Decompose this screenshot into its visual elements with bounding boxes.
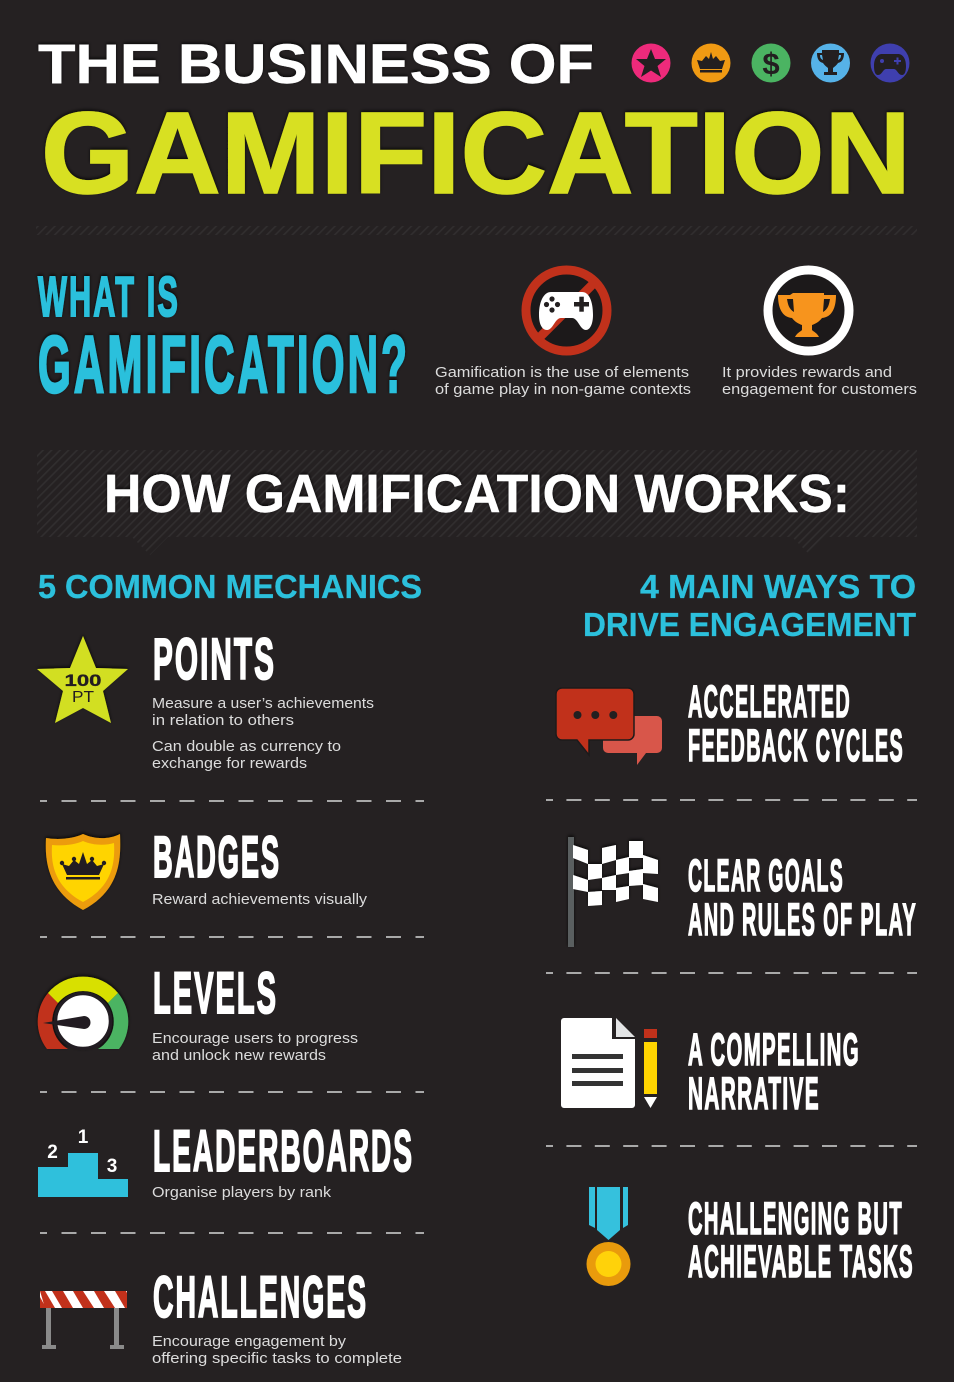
icon: 100 pt star: 100 — [64, 671, 102, 690]
mechanic: challenges: CHALLENGES — [153, 1265, 368, 1330]
text: levels description: Encourage users to progress — [152, 1031, 358, 1047]
way: accelerated feedback cycles — [556, 676, 904, 771]
text: definition — [435, 365, 691, 398]
text: points description: Measure a user’s achievements — [152, 696, 374, 712]
icon: crossed out game controller — [526, 270, 607, 351]
heading: 4 main ways to drive engagement: 4 MAIN WAYS TO — [640, 568, 916, 605]
text: challenges description: offering specific tasks to complete — [152, 1351, 402, 1367]
mechanic: leaderboards — [38, 1119, 414, 1201]
icon: trophy in ring — [768, 270, 849, 351]
text: accelerated feedback cycles — [688, 676, 904, 771]
mechanic: challenges — [40, 1265, 402, 1367]
icon: dollar badge — [752, 44, 790, 82]
icon: controller badge — [870, 44, 910, 82]
icon: dollar badge: $ — [762, 46, 780, 81]
text: points description: exchange for rewards — [152, 756, 307, 772]
header badge icons — [632, 44, 910, 82]
heading line: Gamification?: GAMIFICATION? — [38, 320, 410, 410]
heading: points: POINTS — [153, 627, 276, 692]
heading: 4 main ways to drive engagement: DRIVE ENGAGEMENT — [583, 606, 916, 643]
text: challenging but achievable tasks — [688, 1193, 914, 1287]
icon: speech bubbles — [556, 688, 662, 765]
icon: medal — [586, 1187, 630, 1286]
icon: crown badge — [692, 44, 730, 82]
heading: 4 main ways to drive engagement — [583, 568, 916, 643]
heading: levels: LEVELS — [153, 961, 278, 1026]
icon: 100 pt star: PT — [72, 689, 95, 706]
way: clear goals — [568, 837, 917, 947]
text: badges description: Reward achievements visually — [152, 892, 368, 908]
mechanic: levels — [38, 961, 358, 1064]
mechanic: points — [37, 627, 374, 772]
text: challenges description: Encourage engagement by — [152, 1334, 347, 1350]
panel: 4 main ways to drive engagement — [546, 568, 917, 1287]
text: points description — [152, 696, 374, 772]
mechanic: badges: BADGES — [153, 825, 281, 890]
way: challenging but achievable tasks — [586, 1187, 914, 1287]
panel: how gamification works banner — [37, 450, 917, 555]
heading line: What is: WHAT IS — [38, 265, 180, 329]
title line: Gamification: GAMIFICATION — [41, 88, 911, 218]
title line: The Business of: THE BUSINESS OF — [38, 32, 594, 95]
icon: 100 pt star — [37, 636, 128, 723]
text: levels description: and unlock new rewards — [152, 1048, 326, 1064]
definition block — [435, 270, 917, 398]
icon: gauge — [38, 977, 128, 1049]
text: a compelling narrative — [688, 1024, 860, 1119]
text: rewards — [722, 365, 917, 398]
mechanic: badges — [46, 825, 368, 910]
icon: checkered flag — [568, 837, 658, 947]
icon: podium: 1 — [78, 1127, 89, 1148]
icon: crown shield — [46, 834, 120, 910]
panel: 5 common mechanics: LEADERBOARDS — [153, 1119, 414, 1184]
icon: road barrier — [40, 1291, 127, 1349]
heading: what is gamification — [38, 265, 410, 410]
icon: document and pencil — [561, 1018, 657, 1108]
text: points description: in relation to others — [152, 713, 294, 729]
way: compelling narrative — [561, 1018, 860, 1119]
icon: trophy badge — [811, 44, 850, 82]
icon: podium: 3 — [107, 1156, 117, 1177]
icon: podium: 2 — [47, 1142, 58, 1163]
heading: how gamification works: HOW GAMIFICATION WORKS: — [104, 464, 850, 524]
text: rewards: engagement for customers — [722, 382, 917, 398]
icon: star badge — [632, 44, 670, 82]
icon: podium — [38, 1127, 128, 1197]
text: levels description — [152, 1031, 358, 1064]
text: definition: of game play in non-game contexts — [435, 382, 691, 398]
hatched divider — [36, 226, 917, 235]
text: leaderboards description: Organise players by rank — [152, 1185, 332, 1201]
text: rewards: It provides rewards and — [722, 365, 892, 381]
text: clear goals and rules of play — [688, 850, 917, 945]
heading: 5 common mechanics: 5 COMMON MECHANICS — [38, 568, 422, 605]
panel: 5 common mechanics — [37, 568, 424, 1367]
text: points description: Can double as currency to — [152, 739, 341, 755]
text: challenges description — [152, 1334, 402, 1367]
text: definition: Gamification is the use of elements — [435, 365, 689, 381]
